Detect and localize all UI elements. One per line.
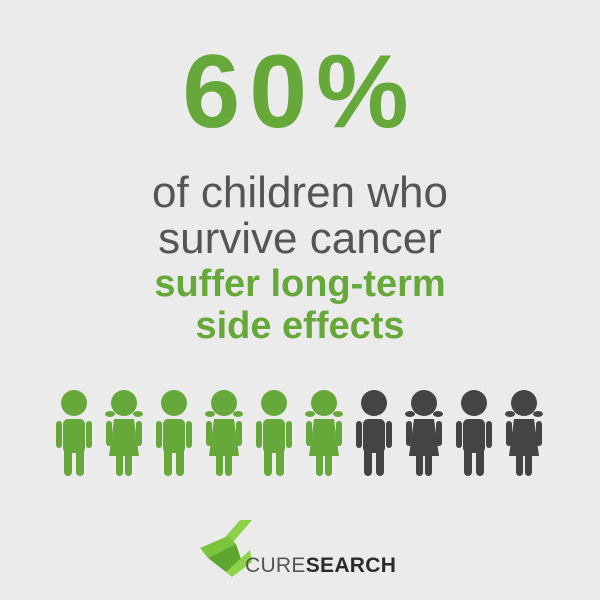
- icon: green children (6): [56, 390, 343, 476]
- icon: CureSearch logo mark: [200, 520, 252, 577]
- text block: of children who survive cancer: [152, 168, 448, 263]
- title: 60%: 60%: [182, 34, 418, 150]
- text block: of children who survive cancer: survive cancer: [158, 214, 442, 263]
- text block: suffer long-term side effects: side effects: [195, 305, 405, 347]
- icon: gray children (4): [356, 390, 543, 476]
- text block: suffer long-term side effects: suffer long-term: [154, 263, 446, 305]
- logo text: CURESEARCH: CURESEARCH: [245, 554, 396, 577]
- text block: suffer long-term side effects: [154, 263, 446, 347]
- text block: of children who survive cancer: of children who: [152, 168, 448, 217]
